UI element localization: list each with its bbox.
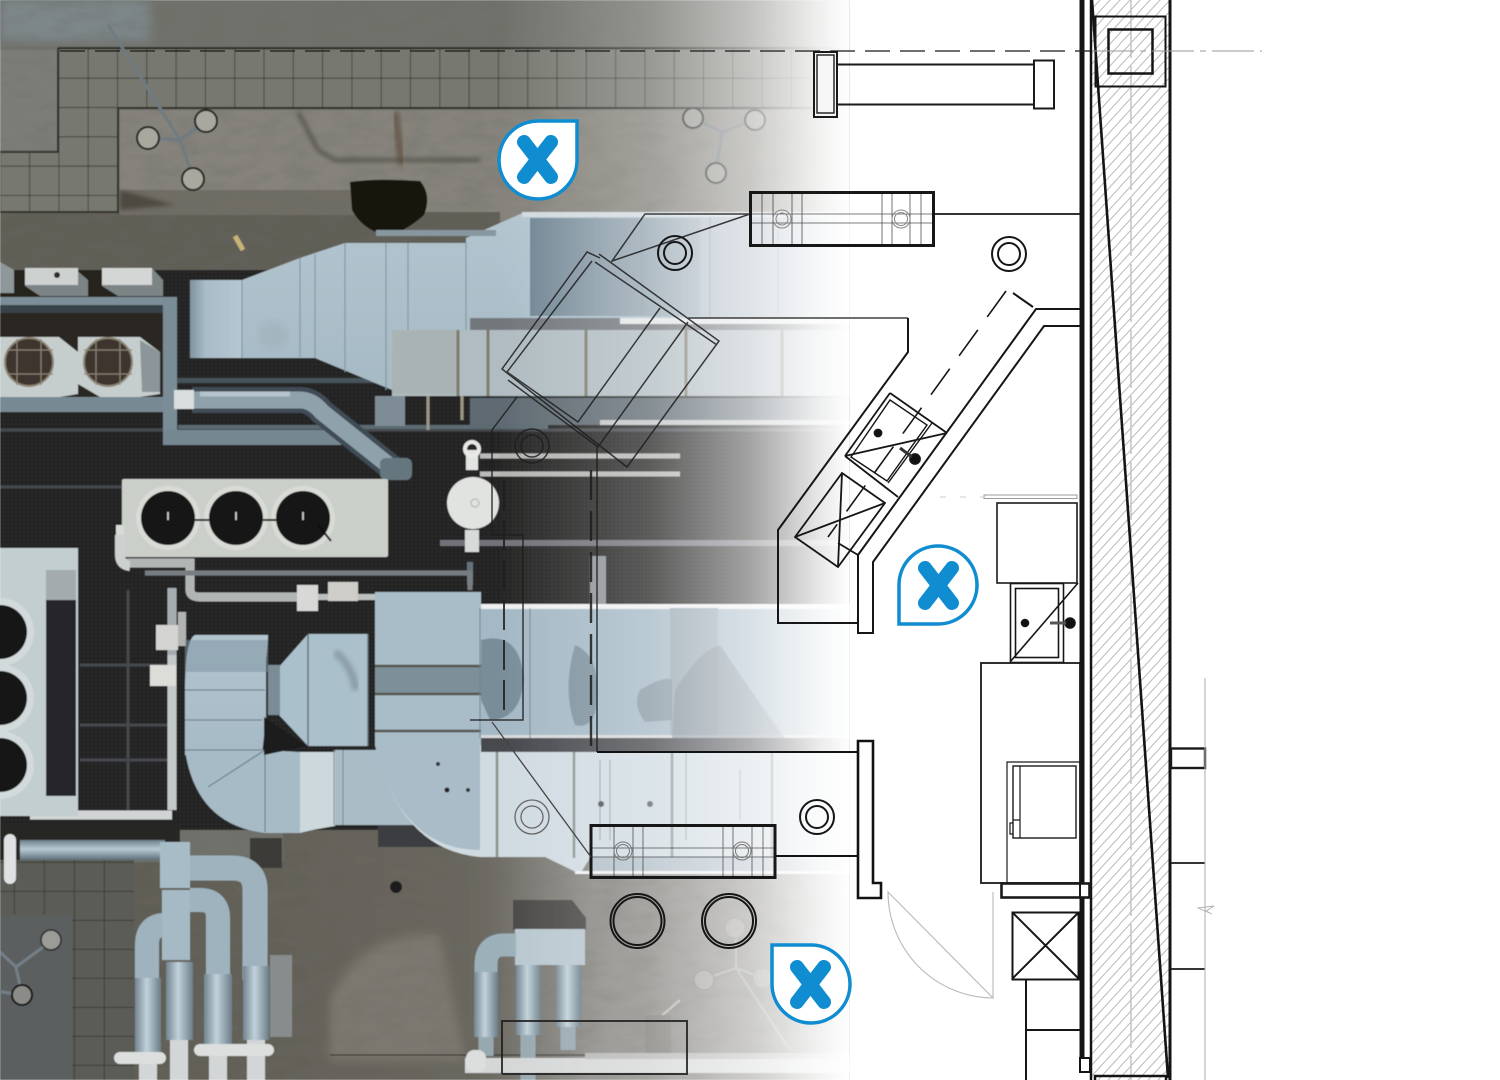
steel bracket beside upper duct: [235, 236, 243, 250]
photo: rooftop ventilation equipment: [0, 0, 880, 1080]
blueprint: worktop shelf and box: [940, 495, 1077, 583]
blueprint: floor drain circles: [515, 236, 1026, 948]
marker pin: right middle: [899, 546, 977, 624]
white gradient fade into paper: [500, 0, 850, 1080]
bottom centre pipe cluster: [465, 900, 880, 1080]
roof tiles: [0, 48, 880, 212]
tripod anchor top right: [683, 108, 765, 183]
grating field: [0, 270, 880, 830]
marker pin: bottom: [772, 945, 850, 1023]
blueprint: top louvre element: [814, 52, 1054, 117]
white valve assembly: [447, 442, 500, 585]
lower box of upper duct: [375, 318, 880, 430]
condenser with three fans: [116, 479, 388, 557]
lower elbow duct: [185, 635, 427, 833]
tripod anchor bottom right: [646, 919, 782, 1048]
steel frame: [0, 297, 548, 445]
large centre duct: [375, 592, 880, 874]
blueprint: door swing: [888, 892, 993, 998]
blueprint: crossed shaft box: [1012, 912, 1080, 1080]
blueprint: wall sink: [1010, 583, 1078, 662]
large left condenser unit: [0, 548, 78, 816]
roof stains: [120, 112, 480, 236]
transition duct: [268, 634, 368, 746]
blueprint: equipment block with oven: [981, 663, 1090, 898]
outdoor AC units: [0, 337, 160, 397]
pipework below condenser: [30, 535, 470, 815]
silver pipe with elbow: [174, 390, 412, 480]
blueprint: upper grille: [750, 192, 1080, 246]
tripod anchor top left: [108, 25, 217, 190]
blueprint: wall section: [1080, 0, 1170, 1080]
blueprint: angled kitchen counter: [778, 291, 1080, 633]
blueprint: dashed datum line: [60, 50, 1262, 52]
marker pin: top centre: [499, 121, 577, 199]
blueprint: right side projections: [1171, 678, 1214, 1080]
blueprint: angled cabinet with cross: [795, 473, 885, 567]
bottom left pipe cluster: [10, 840, 292, 1080]
dark gap between ducts: [264, 717, 307, 755]
lower roof concrete: [0, 826, 783, 1080]
tripod anchor bottom left: [0, 930, 61, 1005]
blueprint: lower wall pier: [597, 741, 881, 898]
blueprint: lower grille: [492, 722, 775, 878]
blueprint: bottom rectangle outline: [502, 1021, 687, 1074]
small roof units: [0, 262, 163, 296]
blueprint: angled sink: [845, 393, 947, 497]
upper duct run: [190, 212, 880, 390]
centre upper duct with water stains: [480, 604, 880, 752]
blueprint: rotated duct outline: [470, 214, 908, 752]
